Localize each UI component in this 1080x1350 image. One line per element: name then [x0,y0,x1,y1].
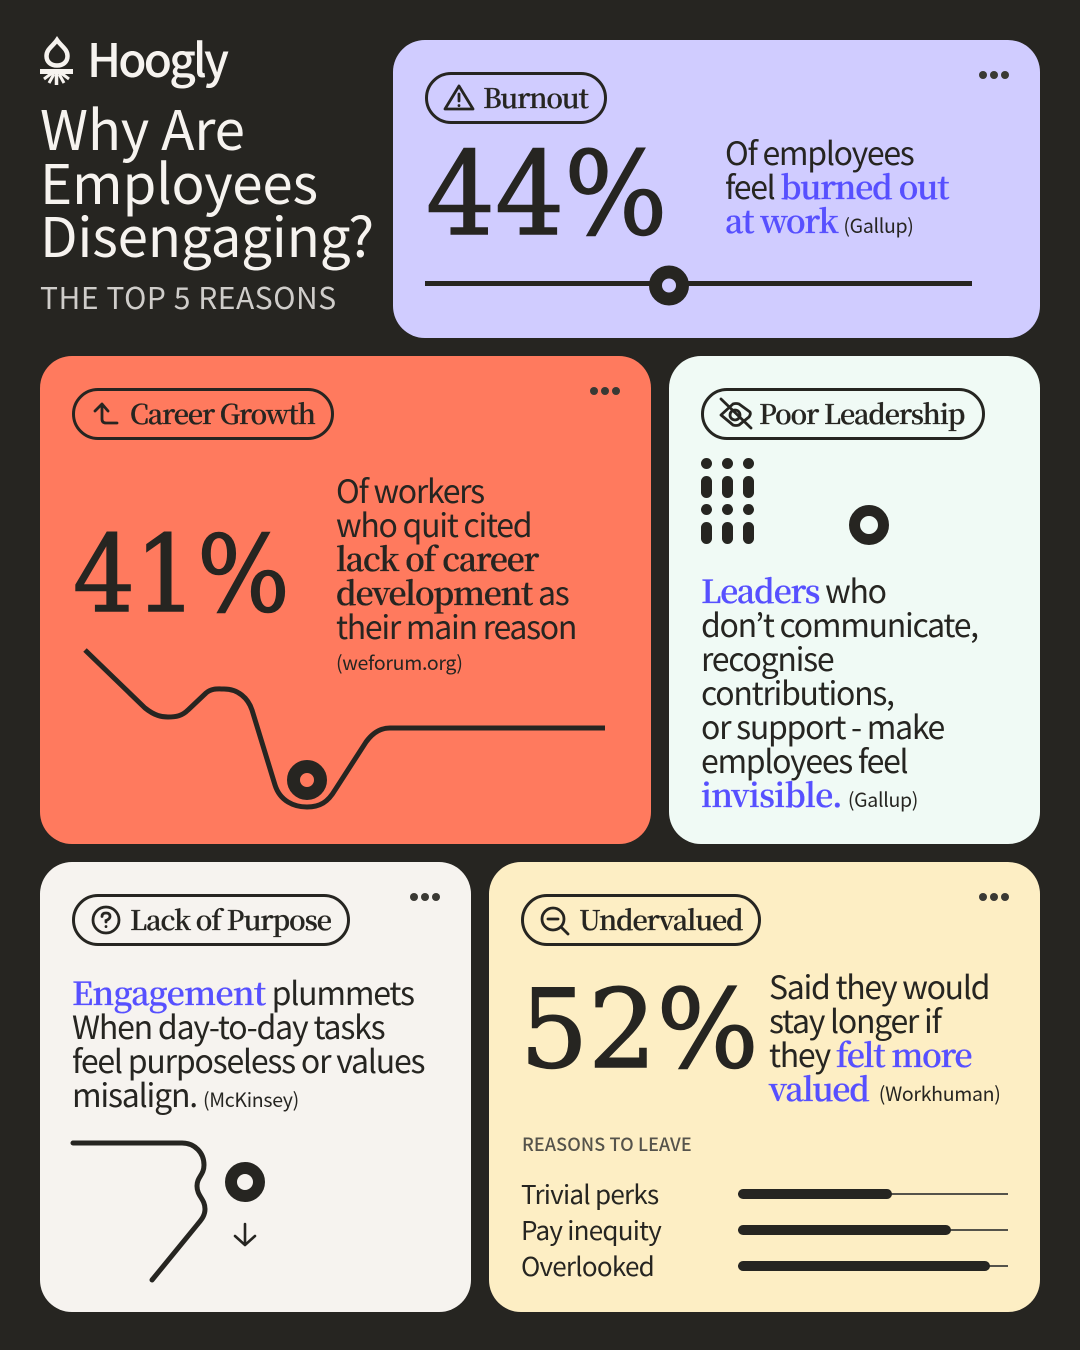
title [40,87,374,273]
chart: valley curve [83,648,605,810]
menu dots [979,893,1009,901]
description: development as [336,569,568,615]
subtitle: THE TOP 5 REASONS [40,274,337,318]
description [336,467,576,649]
icon: flame and roots [40,36,73,85]
stat: 52%: 52% [520,966,759,1093]
description: Said they would [769,962,989,1008]
panel: career growth [40,356,651,844]
menu dots [590,387,620,395]
tag: undervalued [521,894,761,946]
menu dots [410,893,440,901]
source: (weforum.org) [336,647,463,676]
description: they felt more [769,1030,971,1076]
tag: poor leadership: Poor Leadership [759,393,964,432]
description: who quit cited [336,501,531,547]
description: contributions, [701,669,894,715]
description: When day-to-day tasks [72,1003,384,1049]
title: Why Are [40,87,245,166]
description: recognise [701,635,833,681]
description: Of employees [725,129,913,175]
title: Disengaging? [40,194,374,273]
description: Engagement plummets [72,969,414,1015]
description: stay longer if [769,996,941,1042]
description [768,962,1001,1110]
description [701,567,978,817]
stat: 41%: 41% [73,513,290,636]
description: Leaders who [701,567,886,613]
row: pay inequity [521,1211,1008,1248]
description: don’t communicate, [701,601,978,647]
dot pattern [701,458,754,544]
panel: lack of purpose [40,862,471,1312]
tag: burnout [425,72,607,124]
panel: burnout [393,40,1040,338]
description: or support - make [701,703,944,749]
panel: undervalued [489,862,1040,1312]
tag: career growth [72,388,334,440]
description: Of workers [336,467,484,513]
row: trivial perks [521,1175,1008,1212]
description: misalign. (McKinsey) [72,1071,299,1117]
chart: cliff curve [70,1140,208,1282]
description: their main reason [336,603,576,649]
description [725,129,950,243]
row: overlooked [521,1247,1008,1284]
description: employees feel [701,737,907,783]
slider [425,266,972,306]
description: valued (Workhuman) [769,1064,1001,1110]
marker [225,1162,265,1202]
tag: burnout: Burnout [483,77,588,116]
icon: down arrow [234,1222,256,1246]
stat: 44%: 44% [426,128,668,262]
wordmark: Hoogly [87,25,226,91]
description: invisible. (Gallup) [701,771,918,817]
tag: career growth: Career Growth [130,393,315,432]
description: at work (Gallup) [725,197,914,243]
description: feel purposeless or values [72,1037,424,1083]
bar chart [521,1175,1008,1284]
marker [849,505,889,545]
row: overlooked: Overlooked [521,1247,654,1284]
title: Employees [40,140,318,220]
panel: poor leadership [669,356,1040,844]
description: lack of career [336,535,538,581]
row: pay inequity: Pay inequity [521,1211,661,1248]
tag: lack of purpose: Lack of Purpose [130,899,331,938]
description [72,969,424,1117]
menu dots [979,71,1009,79]
description: feel burned out [725,163,948,209]
chart heading: REASONS TO LEAVE [522,1131,692,1157]
tag: poor leadership [701,388,985,440]
logo: Hoogly [40,25,228,91]
tag: undervalued: Undervalued [579,899,743,938]
tag: lack of purpose [72,894,350,946]
row: trivial perks: Trivial perks [521,1175,658,1212]
